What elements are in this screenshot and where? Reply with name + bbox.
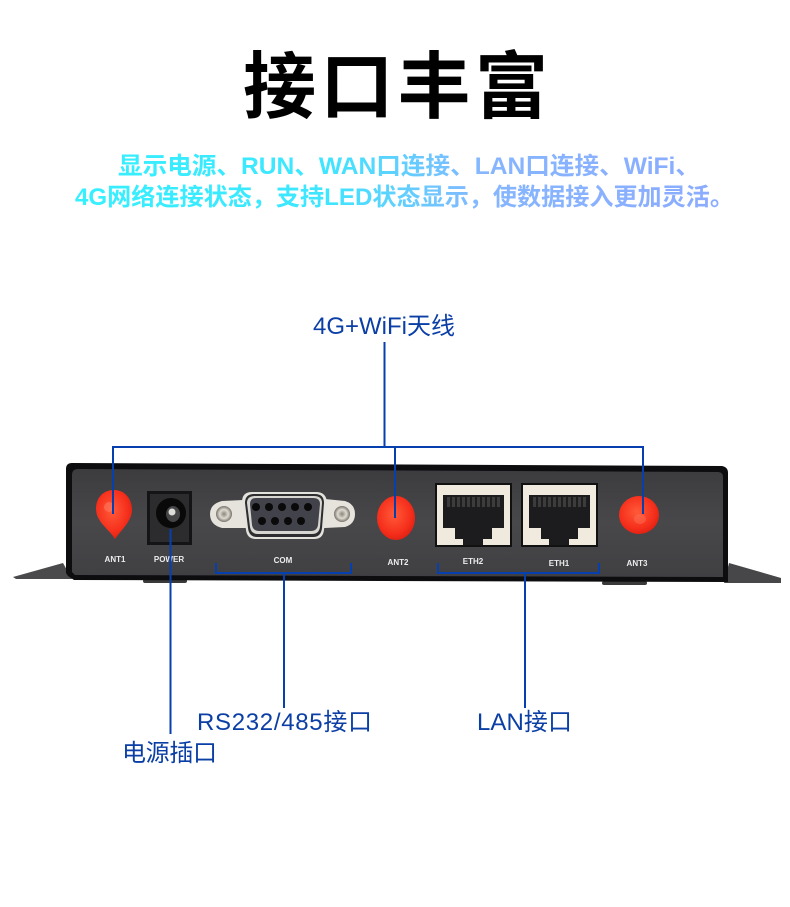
device: router rear panel [13,463,781,585]
ETH2 port [435,483,512,547]
ANT1 connector [96,490,132,539]
port labels: ANT1 [105,555,126,564]
callout bracket: COM [216,563,351,708]
subtitle text [75,153,734,211]
port labels: ANT3 [627,559,648,568]
label: antenna: 4G+WiFi天线 [313,313,455,340]
callout bracket: LAN [438,563,599,708]
callout lines: antenna [113,342,643,518]
subtitle text: 显示电源、RUN、WAN口连接、LAN口连接、WiFi、 [118,153,700,180]
port labels: ETH1 [549,559,570,568]
label: power: 电源插口 [122,740,217,767]
chassis face [72,469,723,577]
label: LAN: LAN接口 [477,709,572,736]
port labels: ANT2 [388,558,409,567]
rubber feet [143,579,647,585]
COM serial port [210,492,355,539]
power jack [147,491,192,545]
right mounting flange [724,563,781,583]
title: 接口丰富 [243,28,548,134]
ETH1 port [521,483,598,547]
label: RS232/485: RS232/485接口 [197,709,372,736]
left mounting flange [13,563,72,579]
ANT2 connector [377,496,415,540]
subtitle text: 4G网络连接状态，支持LED状态显示，使数据接入更加灵活。 [75,183,734,211]
port labels: COM [274,556,293,565]
callout line: power [170,529,172,734]
port labels: ETH2 [463,557,484,566]
ANT3 connector [619,496,659,534]
port labels: POWER [154,555,184,564]
port labels [105,555,648,568]
chassis outer [66,463,728,582]
